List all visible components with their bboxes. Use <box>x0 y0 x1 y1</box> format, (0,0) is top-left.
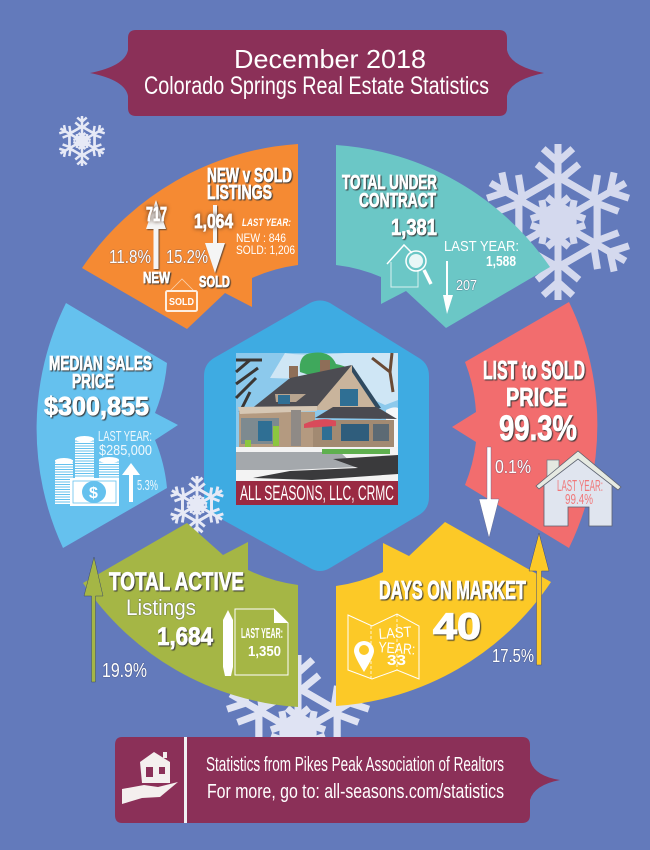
heading: LIST to SOLD <box>483 355 585 385</box>
icon: house last year <box>536 451 621 526</box>
last year: 1,588 <box>486 253 516 270</box>
last year: NEW : 846 <box>236 231 286 245</box>
company name banner <box>236 481 398 505</box>
values <box>146 204 234 233</box>
icon: sold sign <box>166 279 197 311</box>
company name banner: ALL SEASONS, LLC, CRMC <box>240 482 394 505</box>
percentages <box>109 247 208 267</box>
footer text: Statistics from Pikes Peak Association of Realtors <box>206 754 504 776</box>
heading: TOTAL ACTIVE <box>109 568 244 596</box>
heading: CONTRACT <box>359 190 436 212</box>
icon: coins and money <box>55 436 119 506</box>
arrow labels <box>143 270 230 291</box>
last year: LAST YEAR: <box>242 217 291 229</box>
value: 99.3% <box>499 409 577 448</box>
centre hexagon <box>204 300 429 571</box>
change: 0.1% <box>495 457 531 477</box>
heading: MEDIAN SALES <box>49 353 152 375</box>
heading: PRICE <box>506 382 567 412</box>
arrow labels: NEW <box>143 270 171 287</box>
percentages: 11.8% <box>109 247 151 267</box>
heading <box>342 172 437 212</box>
title banner <box>90 30 544 116</box>
icon: house last year: 99.4% <box>565 491 593 508</box>
values: 717 <box>146 204 167 226</box>
arrow: down <box>443 261 453 314</box>
heading <box>49 353 152 393</box>
snowflake: small centre left <box>165 476 229 534</box>
heading: DAYS ON MARKET <box>379 575 526 605</box>
icon: sold sign: SOLD <box>169 297 194 308</box>
footer text <box>206 754 504 803</box>
heading <box>483 355 585 412</box>
change: 19.9% <box>102 660 147 682</box>
heading: NEW v SOLD <box>207 165 292 187</box>
arrow: up <box>122 463 140 502</box>
panel: list to sold price <box>452 302 621 548</box>
panel: days on market <box>336 522 551 706</box>
icon: coins and money: $ <box>89 485 98 502</box>
heading: LISTINGS <box>207 182 272 204</box>
last year <box>444 238 519 270</box>
title: date: December 2018 <box>234 44 426 74</box>
footer banner <box>115 737 560 823</box>
change: 17.5% <box>492 646 534 666</box>
heading: PRICE <box>72 371 114 393</box>
change: 207 <box>456 277 477 294</box>
arrow: sold down <box>205 205 225 273</box>
last year: $285,000 <box>99 442 152 459</box>
icon: map with last year: YEAR: <box>378 639 416 659</box>
icon: map with last year <box>348 614 419 679</box>
arrow: up <box>84 557 103 682</box>
arrow labels: SOLD <box>199 274 230 291</box>
value: 40 <box>433 606 481 647</box>
last year <box>98 428 152 459</box>
last year: LAST YEAR: <box>444 238 519 255</box>
panel: median sales price <box>37 303 178 548</box>
icon: house last year: LAST YEAR: <box>557 478 603 495</box>
icon: map with last year: LAST <box>378 624 412 643</box>
icon: paper last year <box>235 609 288 675</box>
footer text: For more, go to: all-seasons.com/statistics <box>207 781 504 803</box>
icon: map with last year: 33 <box>387 652 406 669</box>
snowflake: small top left <box>54 116 110 166</box>
icon: pen <box>223 610 233 676</box>
snowflake: bottom centre <box>211 655 385 811</box>
icon: paper last year: LAST YEAR: <box>241 625 283 642</box>
company house picture <box>236 352 398 505</box>
icon: hand holding house <box>122 752 178 804</box>
subheading: Listings <box>126 595 196 620</box>
values: 1,064 <box>194 211 234 233</box>
heading <box>207 165 292 204</box>
arrow: down <box>479 447 499 538</box>
panel: new v sold listings <box>82 144 298 329</box>
panel: total active listings <box>83 523 298 707</box>
icon: paper last year: 1,350 <box>248 643 281 660</box>
heading: TOTAL UNDER <box>342 172 437 194</box>
value: $300,855 <box>44 391 149 421</box>
last year: SOLD: 1,206 <box>236 243 295 257</box>
last year: LAST YEAR: <box>98 428 152 445</box>
change: 5.3% <box>137 477 158 494</box>
title: subtitle: Colorado Springs Real Estate Statistics <box>144 72 489 100</box>
percentages: 15.2% <box>166 247 208 267</box>
snowflake: large top right <box>471 144 645 300</box>
icon: house and magnifier <box>387 245 431 287</box>
panel: total under contract <box>336 145 550 328</box>
arrow: new up <box>146 200 166 269</box>
value: 1,684 <box>157 623 213 651</box>
value: 1,381 <box>391 214 437 240</box>
arrow: up <box>529 533 549 665</box>
last year <box>236 217 295 257</box>
